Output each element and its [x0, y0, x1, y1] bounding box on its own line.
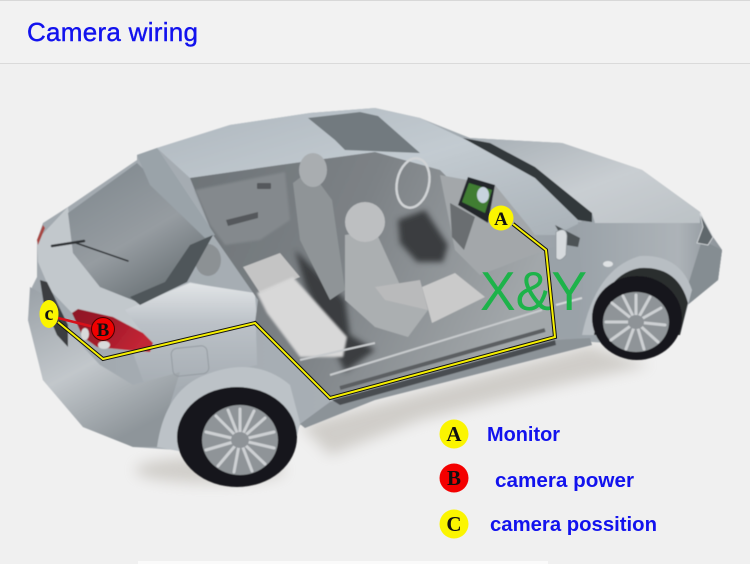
- footwell shadows: [295, 210, 448, 372]
- legend item A: Monitor: A: [446, 422, 462, 446]
- legend item B: camera power: B: [447, 466, 461, 490]
- rear deck lid: [37, 207, 258, 352]
- marker A on car: [488, 206, 514, 230]
- passenger headrest: [345, 202, 385, 242]
- connector line C to B: [58, 318, 94, 327]
- fuel cap: [171, 345, 209, 377]
- legend item A: Monitor: Monitor: [487, 424, 560, 446]
- rear window glass: [68, 163, 213, 303]
- door sill stripes: [300, 310, 545, 388]
- rear wheel arch: [157, 367, 300, 470]
- rear side marker: [37, 225, 45, 245]
- rear headrest: [195, 244, 221, 276]
- centre console: [450, 203, 475, 250]
- ground shadow: [135, 345, 650, 483]
- marker B on car: [92, 318, 114, 341]
- rear spoiler: [137, 148, 215, 238]
- car shapes: [28, 108, 722, 487]
- legend item C: camera possition: [440, 510, 657, 538]
- title: Camera wiring: [27, 17, 198, 47]
- marker A on car: A: [494, 209, 508, 230]
- headlight: [697, 213, 713, 245]
- car illustration: [28, 108, 722, 487]
- wing mirror: [556, 230, 567, 260]
- front indicator: [603, 261, 613, 267]
- legend item B: camera power: [440, 464, 634, 492]
- cabin interior: [190, 152, 555, 398]
- rear seat cushion: [257, 277, 347, 357]
- hood: [470, 138, 700, 223]
- wiring route line: [58, 224, 555, 398]
- driver headrest: [299, 153, 327, 187]
- mirror shadow wedge: [555, 225, 580, 247]
- number plate recess: [40, 280, 68, 347]
- front bumper shade: [685, 240, 722, 307]
- steering wheel: [392, 155, 434, 211]
- sunroof: [308, 112, 420, 153]
- tail light: [72, 309, 153, 352]
- rear door trim: [195, 172, 290, 245]
- car body silhouette: [28, 108, 722, 470]
- bottom edge strip: [138, 561, 548, 564]
- sill: [300, 338, 592, 428]
- legend: [440, 420, 657, 538]
- tail light reflectors: [81, 328, 110, 349]
- header band: [0, 0, 750, 64]
- driver seat back: [293, 170, 345, 300]
- marker C on car: [40, 300, 58, 328]
- legend item C: camera possition: camera possition: [490, 514, 657, 536]
- door handle strip: [556, 298, 582, 305]
- front fender: [575, 222, 722, 345]
- monitor: [458, 177, 495, 223]
- watermark X&Y: X&Y: [480, 260, 587, 322]
- windshield wiper band: [463, 138, 592, 222]
- marker C on car: c: [45, 303, 54, 325]
- legend item C: camera possition: C: [446, 512, 462, 536]
- dashboard: [440, 175, 545, 275]
- rear bumper: [28, 287, 180, 447]
- legend item A: Monitor: [440, 420, 560, 448]
- front wheel: [592, 276, 682, 360]
- rear seat back: [243, 253, 300, 293]
- door panel: [546, 237, 583, 337]
- rear wiper: [52, 241, 128, 261]
- rear quarter highlight panel: [125, 283, 257, 400]
- marker B on car: B: [97, 320, 110, 341]
- passenger seat back: [345, 230, 428, 337]
- passenger seat cushion: [422, 273, 485, 323]
- front wheel arch: [594, 268, 688, 335]
- front wheel arch lip: [582, 256, 692, 335]
- roof panel: [157, 108, 582, 235]
- rear door handle and armrest: [226, 183, 271, 226]
- rear wheel: [177, 387, 297, 487]
- legend item B: camera power: camera power: [495, 470, 634, 492]
